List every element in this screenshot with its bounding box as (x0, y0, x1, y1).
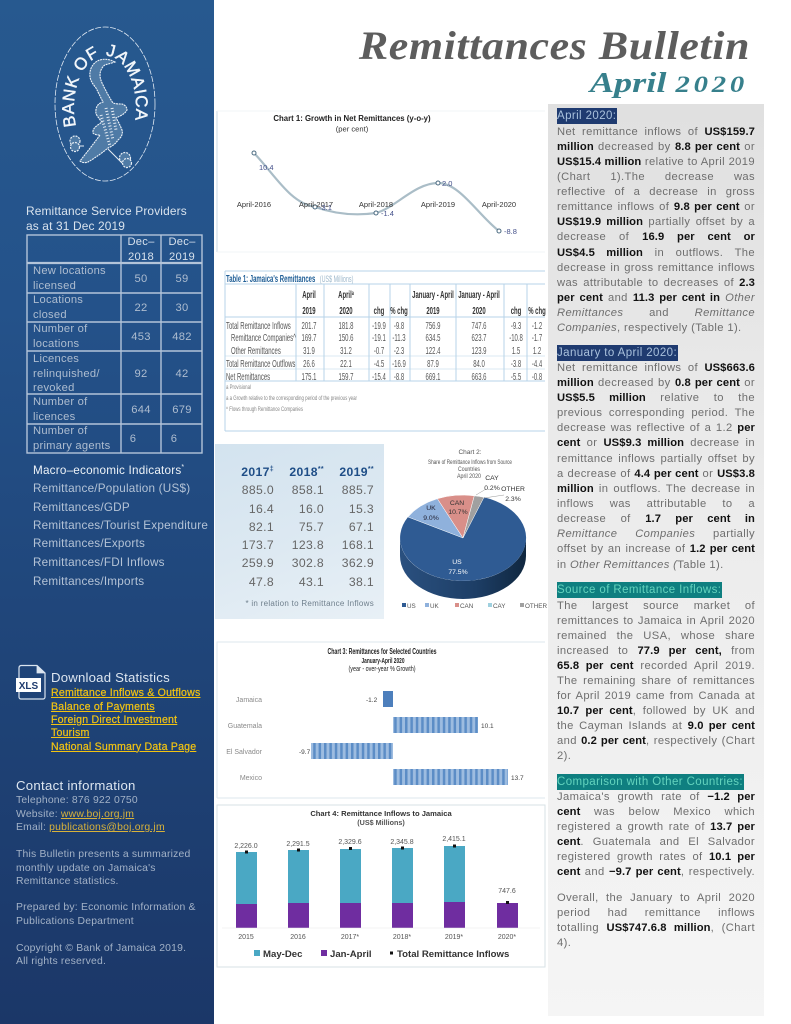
table 1: Jamaica's remittances: -9.3 (511, 319, 521, 331)
table 1: Jamaica's remittances: a a Growth relative to the corresponding period of the previous year (226, 395, 358, 402)
table values: 168.1 (342, 538, 374, 552)
text: contact details: Email: publications@boj.org.jm (16, 822, 165, 833)
table: remittance service providers: licensed (33, 280, 76, 292)
table 1: Jamaica's remittances (224, 270, 546, 432)
table values: 885.0 (242, 483, 274, 497)
table 1: Jamaica's remittances: -9.8 (394, 319, 404, 331)
heading: remittance service providers: as at 31 Dec 2019 (26, 219, 125, 233)
chart 4: remittance inflows to Jamaica: Chart 4: Remittance Inflows to Jamaica (310, 809, 452, 818)
chart 4: remittance inflows to Jamaica: 2020* (498, 934, 516, 941)
text: April 2020 commentary: remittance inflows of 9.8 per cent or (557, 201, 755, 213)
chart 1: growth in net remittances: (per cent) (336, 124, 369, 134)
text: January to April commentary: US$5.5 million relative to the (557, 392, 755, 404)
table: remittance service providers: 2019 (169, 250, 195, 262)
chart 1: growth in net remittances: 10.4 (259, 163, 274, 172)
chart 1: growth in net remittances: -3.1 (319, 203, 332, 212)
table: remittance service providers: 644 (131, 404, 151, 416)
table 1: Jamaica's remittances: ^ Flows through Remittance Companies (226, 406, 304, 413)
table: remittance service providers: 482 (172, 331, 192, 343)
table 1: Jamaica's remittances: 181.8 (339, 319, 354, 331)
text: April 2020 commentary: decrease in gross remittance inflows (557, 262, 755, 274)
text: copyright (16, 943, 186, 967)
text: source commentary (557, 600, 755, 762)
text: April 2020 commentary: decrease of 16.9 per cent or (557, 231, 755, 243)
table 1: Jamaica's remittances: Total Remittance Outflows (226, 357, 295, 369)
text: January to April commentary: million decreased by 0.8 per cent or (557, 377, 755, 389)
text: January to April commentary: million in outflows. The decrease in (557, 483, 755, 495)
icon: XLS file (16, 664, 46, 700)
table 1: Jamaica's remittances: Total Remittance Inflows (226, 319, 291, 331)
text: January to April commentary: in Other Remittances (Table 1). (557, 559, 724, 571)
list: macro-economic indicator labels: Remittances/Exports (33, 537, 145, 550)
chart 3: remittances for selected countries (216, 642, 545, 798)
list: macro-economic indicator labels: Remittances/Tourist Expenditure (33, 519, 208, 532)
text: January to April commentary: a decrease of 4.4 per cent or US$3.8 (557, 468, 755, 480)
text: comparison commentary: Jamaica's growth rate of −1.2 per (557, 791, 755, 803)
table 1: Jamaica's remittances: 175.1 (302, 370, 317, 382)
text: January to April commentary: inflows was attributable to a (557, 498, 755, 510)
text: comparison commentary: cent and −9.7 per cent, respectively. (557, 866, 755, 878)
chart 4: remittance inflows to Jamaica: 2015 (238, 934, 254, 941)
table note: * in relation to Remittance Inflows (245, 599, 374, 608)
list: download links: National Summary Data Page (51, 740, 196, 752)
text: comparison commentary: registered a growth rate of 13.7 per (557, 821, 755, 833)
table 1: Jamaica's remittances: 169.7 (302, 331, 317, 343)
chart 2: pie chart of source countries: CAN (450, 500, 464, 507)
table 1: Jamaica's remittances: -19.1 (372, 331, 386, 343)
chart 3: remittances for selected countries: 10.1 (481, 723, 494, 730)
table values: 15.3 (349, 502, 374, 516)
chart 4: remittance inflows to Jamaica: May-Dec (263, 949, 303, 960)
chart 4: remittance inflows to Jamaica: 2,415.1 (442, 836, 466, 843)
table 1: Jamaica's remittances: Net Remittances (226, 370, 270, 382)
chart 3: remittances for selected countries: January-April 2020 (362, 656, 404, 665)
text: January to April commentary: remittance inflows partially offset by (557, 453, 755, 465)
table 1: Jamaica's remittances: 663.6 (472, 370, 487, 382)
text: bulletin description: Remittance statistics. (16, 876, 119, 887)
text: source commentary: increased to 77.9 per cent, from (557, 645, 755, 657)
table 1: Jamaica's remittances: 1.5 (512, 344, 520, 356)
list: download links (51, 687, 200, 753)
table 1: Jamaica's remittances: -0.8 (532, 370, 542, 382)
table: remittance service providers: licences (33, 410, 75, 422)
table 1: Jamaica's remittances: 201.7 (302, 319, 317, 331)
table: remittance service providers: 50 (135, 273, 147, 285)
chart 3: remittances for selected countries: -9.7 (299, 749, 311, 756)
text: prepared by: Publications Department (16, 916, 134, 927)
table 1: Jamaica's remittances: 122.4 (425, 344, 441, 356)
table: remittance service providers: New locations (33, 265, 106, 277)
text: bulletin description (16, 849, 190, 887)
icon: Bank of Jamaica logo (54, 26, 156, 182)
text: April 2020 commentary: Net remittance inflows of US$159.7 (557, 126, 755, 138)
table 1: Jamaica's remittances: chg (374, 304, 384, 316)
table 1: Jamaica's remittances: 756.9 (425, 319, 441, 331)
text: overall commentary: 4). (557, 937, 571, 949)
text: source commentary: the Cayman Islands at 9.0 per cent (557, 720, 755, 732)
chart 1: growth in net remittances: April-2017 (299, 200, 333, 209)
table: remittance service providers: closed (33, 308, 67, 320)
table 1: Jamaica's remittances: 2020 (472, 304, 486, 316)
text: January to April commentary: previous corresponding period. The (557, 407, 755, 419)
table 1: Jamaica's remittances: April (338, 288, 352, 300)
title: Remittances Bulletin (359, 23, 750, 68)
table: remittance service providers (26, 234, 203, 454)
table values (242, 483, 374, 589)
chart 2: pie chart of source countries: UK (426, 505, 436, 512)
text: April 2020 commentary: reflective of a decrease in gross (557, 186, 755, 198)
table: remittance service providers: 22 (135, 302, 147, 314)
chart 1: growth in net remittances (216, 110, 545, 252)
text: April 2020 commentary: per cent and 11.3 per cent in Other (557, 292, 755, 304)
chart 4: remittance inflows to Jamaica: 2,291.5 (286, 841, 310, 848)
table 1: Jamaica's remittances: April (302, 288, 316, 300)
text: April 2020 commentary: US$15.4 million relative to April 2019 (557, 156, 755, 168)
chart 4: remittance inflows to Jamaica: 2,329.6 (338, 839, 362, 846)
table: remittance service providers: Locations (33, 294, 83, 306)
text: January to April commentary: Net remittance inflows of US$663.6 (557, 362, 755, 374)
list: macro-economic indicator labels (33, 482, 208, 588)
table header years: 2017‡ (241, 465, 274, 479)
text: source commentary: remittances to Jamaica in April 2020 (557, 615, 755, 627)
text: January to April commentary: Remittance Companies partially (557, 528, 755, 540)
table 1: Jamaica's remittances: -19.9 (372, 319, 386, 331)
text: prepared by: Prepared by: Economic Information & (16, 902, 196, 913)
table values: 123.8 (292, 538, 324, 552)
chart 3: remittances for selected countries: -1.2 (366, 697, 378, 704)
table values: 858.1 (292, 483, 324, 497)
table 1: Jamaica's remittances: 123.9 (472, 344, 487, 356)
chart 2: pie chart of source countries: Countries (458, 466, 481, 473)
table: remittance service providers: revoked (33, 382, 75, 394)
text: source commentary: 2). (557, 750, 571, 762)
table header years: 2019** (339, 465, 374, 479)
chart 3: remittances for selected countries: 13.7 (511, 775, 524, 782)
table values: 82.1 (249, 520, 274, 534)
table: remittance service providers: 2018 (128, 250, 154, 262)
heading: January to April 2020: January to April 2020: (557, 347, 677, 359)
text: source commentary: 65.8 per cent recorded April 2019. (557, 660, 755, 672)
table 1: Jamaica's remittances: Table 1: Jamaica's Remittances (226, 272, 315, 284)
table 1: Jamaica's remittances: January - April (412, 288, 454, 300)
table 1: Jamaica's remittances: a Provisional (226, 384, 251, 391)
list: download links: Balance of Payments (51, 700, 155, 712)
chart 1: growth in net remittances: April-2020 (482, 200, 516, 209)
chart 1: growth in net remittances: 2.0 (442, 179, 452, 188)
list: macro-economic indicator labels: Remittance/Population (US$) (33, 482, 190, 495)
table: remittance service providers: 6 (130, 433, 136, 445)
heading: comparison with other countries: Comparison with Other Countries: (557, 776, 743, 788)
table header years (241, 465, 374, 479)
table 1: Jamaica's remittances: -1.2 (532, 319, 542, 331)
list: macro-economic indicator labels: Remittances/GDP (33, 501, 130, 514)
table 1: Jamaica's remittances: -8.8 (394, 370, 404, 382)
panel: commentary (548, 104, 764, 1016)
table 1: Jamaica's remittances: -10.8 (509, 331, 523, 343)
table: remittance service providers: primary agents (33, 440, 110, 452)
text: April 2020 commentary: US$4.5 million in outflows. The (557, 247, 755, 259)
text: comparison commentary: cent was below Mexico which (557, 806, 755, 818)
chart 3: remittances for selected countries: Jamaica (236, 697, 262, 704)
table values: 16.0 (299, 502, 324, 516)
chart 4: remittance inflows to Jamaica: 747.6 (498, 888, 516, 895)
icon: Bank of Jamaica logo: BANK OF JAMAICA (62, 44, 148, 127)
text: January to April commentary (557, 362, 755, 571)
chart 3: remittances for selected countries: El Salvador (226, 749, 263, 756)
table values: 47.8 (249, 575, 274, 589)
chart 3: remittances for selected countries: Chart 3: Remittances for Selected Countries (328, 647, 437, 656)
text: contact details: Website: www.boj.org.jm (16, 809, 134, 820)
table 1: Jamaica's remittances: Remittance Companies^ (231, 331, 296, 343)
text: overall commentary: Overall, the January to April 2020 (557, 892, 755, 904)
table 1: Jamaica's remittances: January - April (458, 288, 500, 300)
table 1: Jamaica's remittances: -4.4 (532, 357, 542, 369)
text: overall commentary: period had remittance inflows (557, 907, 755, 919)
subtitle: April 2020: April 2020 (590, 67, 748, 99)
table: remittance service providers: locations (33, 338, 79, 350)
text: bulletin description: monthly update on Jamaica's (16, 863, 156, 874)
text: January to April commentary: offset by an increase of 1.2 per cent (557, 543, 755, 555)
table 1: Jamaica's remittances: 634.5 (425, 331, 441, 343)
table: remittance service providers: 59 (176, 273, 188, 285)
chart 3: remittances for selected countries: Mexico (240, 775, 262, 782)
chart 2: pie chart of source countries: 10.7% (448, 509, 468, 516)
text: January to April commentary: decrease of 1.7 per cent in (557, 513, 755, 525)
text: contact details (16, 795, 165, 833)
table: remittance service providers: 42 (176, 368, 188, 380)
text: April 2020 commentary: (Chart 1).The decrease was (557, 171, 755, 183)
table 1: Jamaica's remittances: -4.5 (374, 357, 384, 369)
chart 4: remittance inflows to Jamaica: 2,226.0 (234, 843, 258, 850)
chart 2: pie chart of source countries: Share of Remittance Inflows from Source (428, 459, 512, 466)
table values: 67.1 (349, 520, 374, 534)
table: remittance service providers: Number of (33, 425, 87, 437)
table: remittance service providers: Dec– (168, 236, 196, 248)
heading: source of remittance inflows: Source of Remittance Inflows: (557, 584, 721, 596)
table 1: Jamaica's remittances: 623.7 (472, 331, 487, 343)
table 1: Jamaica's remittances: 159.7 (339, 370, 354, 382)
table 1: Jamaica's remittances: -15.4 (372, 370, 386, 382)
table 1: Jamaica's remittances: -5.5 (511, 370, 521, 382)
table values: 173.7 (242, 538, 274, 552)
table values: 38.1 (349, 575, 374, 589)
text: source commentary: remained the USA, whose share (557, 630, 755, 642)
table 1: Jamaica's remittances: 31.9 (303, 344, 315, 356)
table 1: Jamaica's remittances: 747.6 (472, 319, 487, 331)
chart 2: pie chart of source countries: OTHER (501, 486, 525, 493)
chart 1: growth in net remittances: Chart 1: Growth in Net Remittances (y-o-y) (273, 114, 431, 123)
text: source commentary: The remaining share of remittances (557, 675, 755, 687)
table 1: Jamaica's remittances: 1.2 (533, 344, 541, 356)
text: January to April commentary: decrease was reflective of a 1.2 per (557, 422, 755, 434)
table: remittance service providers: Dec– (127, 236, 155, 248)
table: remittance service providers: 6 (171, 433, 177, 445)
text: copyright: All rights reserved. (16, 956, 106, 967)
table values: 75.7 (299, 520, 324, 534)
text: overall commentary: totalling US$747.6.8 million, (Chart (557, 922, 755, 934)
table: remittance service providers: 30 (176, 302, 188, 314)
table 1: Jamaica's remittances: -16.9 (392, 357, 406, 369)
table 1: Jamaica's remittances: 84.0 (473, 357, 485, 369)
chart 1: growth in net remittances: -1.4 (381, 209, 394, 218)
table values: 885.7 (342, 483, 374, 497)
heading: macro-economic indicators: Macro–economic Indicators* (33, 464, 184, 477)
text: prepared by (16, 902, 196, 927)
chart 1: growth in net remittances: April-2016 (237, 200, 271, 209)
text: April 2020 commentary: was attributable to decreases of 2.3 (557, 277, 755, 289)
table 1: Jamaica's remittances: -2.3 (394, 344, 404, 356)
chart 3: remittances for selected countries: (year - over-year % Growth) (348, 664, 416, 673)
chart 4: remittance inflows to Jamaica: 2017* (341, 934, 359, 941)
list: macro-economic indicator labels: Remittances/FDI Inflows (33, 556, 165, 569)
heading: April 2020: April 2020: (557, 110, 616, 122)
table: remittance service providers: Number of (33, 396, 87, 408)
table values: 362.9 (342, 556, 374, 570)
chart 2: pie chart of source countries (400, 449, 547, 610)
table 1: Jamaica's remittances: 2020 (339, 304, 353, 316)
chart 2: pie chart of source countries: CAY (493, 603, 506, 610)
table 1: Jamaica's remittances: -3.8 (511, 357, 521, 369)
text: April 2020 commentary: Remittances and Remittance (557, 307, 755, 319)
text: comparison commentary: registered growth rates of 10.1 per (557, 851, 755, 863)
text: contact details: Telephone: 876 922 0750 (16, 795, 138, 806)
table 1: Jamaica's remittances: (US$ Millions) (320, 273, 354, 284)
list: download links: Remittance Inflows & Outflows (51, 687, 200, 699)
list: download links: Foreign Direct Investment (51, 714, 177, 726)
heading: download statistics: Download Statistics (51, 670, 170, 685)
text: source commentary: 10.7 per cent, followed by UK and (557, 705, 755, 717)
table header years: 2018** (289, 465, 324, 479)
table 1: Jamaica's remittances: % chg (390, 304, 408, 316)
chart 4: remittance inflows to Jamaica: (US$ Millions) (357, 818, 405, 827)
list: macro-economic indicator labels: Remittances/Imports (33, 575, 144, 588)
table 1: Jamaica's remittances: a (352, 290, 354, 297)
chart 2: pie chart of source countries: 77.5% (448, 569, 468, 576)
text: copyright: Copyright © Bank of Jamaica 2019. (16, 943, 186, 954)
table 1: Jamaica's remittances: 2019 (302, 304, 316, 316)
panel: sidebar (0, 0, 214, 1024)
chart 4: remittance inflows to Jamaica: Jan-April (330, 949, 372, 960)
chart 2: pie chart of source countries: UK (430, 603, 440, 610)
text: April 2020 commentary: Companies, respectively (Table 1). (557, 322, 742, 334)
panel: macro-economic table (215, 444, 384, 619)
chart 2: pie chart of source countries: OTHER (525, 603, 547, 610)
table: remittance service providers: relinquished/ (33, 368, 100, 380)
chart 4: remittance inflows to Jamaica: 2016 (290, 934, 306, 941)
text: January to April commentary: cent or US$9.3 million decrease in (557, 437, 755, 449)
table 1: Jamaica's remittances: 2019 (426, 304, 440, 316)
chart 4: remittance inflows to Jamaica: 2018* (393, 934, 411, 941)
table: remittance service providers: 92 (135, 368, 147, 380)
chart 3: remittances for selected countries: Guatemala (228, 723, 262, 730)
chart 1: growth in net remittances: April-2018 (359, 200, 393, 209)
table values: 259.9 (242, 556, 274, 570)
chart 2: pie chart of source countries: April 2020 (457, 473, 481, 480)
table: remittance service providers: 679 (172, 404, 192, 416)
text: source commentary: and 0.2 per cent, respectively (Chart (557, 735, 755, 747)
chart 1: growth in net remittances: -8.8 (504, 227, 517, 236)
text: source commentary: The largest source market of (557, 600, 755, 612)
chart 2: pie chart of source countries: 0.2% (484, 485, 500, 492)
chart 2: pie chart of source countries: 2.3% (505, 496, 521, 503)
table: remittance service providers: Licences (33, 353, 79, 365)
table 1: Jamaica's remittances: -11.3 (392, 331, 406, 343)
table 1: Jamaica's remittances: chg (511, 304, 521, 316)
table values: 16.4 (249, 502, 274, 516)
chart 4: remittance inflows to Jamaica: 2,345.8 (390, 839, 414, 846)
table 1: Jamaica's remittances: 150.6 (339, 331, 354, 343)
text: comparison commentary: cent. Guatemala and El Salvador (557, 836, 755, 848)
table 1: Jamaica's remittances: 22.1 (340, 357, 352, 369)
table 1: Jamaica's remittances: -0.7 (374, 344, 384, 356)
table: remittance service providers: Number of (33, 323, 87, 335)
table 1: Jamaica's remittances: Other Remittances (231, 344, 281, 356)
chart 4: remittance inflows to Jamaica: Total Remittance Inflows (397, 949, 509, 960)
heading: remittance service providers (26, 204, 187, 233)
table 1: Jamaica's remittances: -1.7 (532, 331, 542, 343)
text: April 2020 commentary: million decreased by 8.8 per cent or (557, 141, 755, 153)
list: download links: Tourism (51, 727, 89, 739)
chart 2: pie chart of source countries: US (407, 603, 416, 610)
chart 4: remittance inflows to Jamaica: 2019* (445, 934, 463, 941)
text: bulletin description: This Bulletin presents a summarized (16, 849, 190, 860)
heading: remittance service providers: Remittance Service Providers (26, 204, 187, 218)
text: April 2020 commentary (557, 126, 755, 334)
table values: 43.1 (299, 575, 324, 589)
table 1: Jamaica's remittances: 26.6 (303, 357, 315, 369)
table 1: Jamaica's remittances: 31.2 (340, 344, 352, 356)
chart 1: growth in net remittances: April-2019 (421, 200, 455, 209)
heading: contact information: Contact information (16, 778, 136, 793)
icon: XLS file: XLS (19, 681, 39, 692)
chart 2: pie chart of source countries: US (452, 559, 462, 566)
table: remittance service providers: 453 (131, 331, 151, 343)
table 1: Jamaica's remittances: 669.1 (425, 370, 441, 382)
text: April 2020 commentary: US$19.9 million partially offset by a (557, 216, 755, 228)
text: source commentary: for April 2019 came from Canada at (557, 690, 755, 702)
chart 2: pie chart of source countries: CAY (485, 475, 499, 482)
table 1: Jamaica's remittances: % chg (528, 304, 546, 316)
table 1: Jamaica's remittances: 87.9 (427, 357, 439, 369)
chart 2: pie chart of source countries: Chart 2: (458, 449, 482, 456)
table values: 302.8 (292, 556, 324, 570)
chart 2: pie chart of source countries: CAN (460, 603, 474, 610)
chart 2: pie chart of source countries: 9.0% (423, 515, 439, 522)
